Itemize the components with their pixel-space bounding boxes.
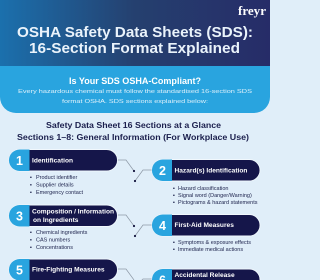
panel: section 6: Accidental Release — [174, 272, 235, 279]
connector 3 to 4 — [117, 215, 152, 237]
panel: section 3: Concentrations — [36, 245, 73, 251]
panel: section 2: ▪ — [173, 186, 175, 192]
panel: section 2: Hazard classification — [178, 186, 228, 192]
panel: section 5: Fire-Fighting Measures — [32, 266, 105, 274]
callout text — [18, 89, 252, 105]
panel: section 4: ▪ — [173, 240, 175, 246]
callout panel: compliance — [0, 66, 270, 113]
section heading: Sections 1–8: General Information (For Workplace Use) — [17, 133, 249, 142]
panel: section 3: ▪ — [30, 245, 32, 251]
panel: section 2: ▪ — [173, 193, 175, 199]
panel: section 4: Immediate medical actions — [178, 247, 243, 253]
callout heading: Is Your SDS OSHA-Compliant? — [69, 76, 201, 86]
panel: section 4: 4 — [159, 219, 166, 233]
title — [17, 25, 253, 57]
panel: section 3: Composition / Information — [32, 208, 114, 216]
panel: section 2: 2 — [159, 164, 166, 178]
logo: freyr: freyr — [238, 3, 266, 18]
panel: section 3: 3 — [16, 210, 23, 224]
section heading: Safety Data Sheet 16 Sections at a Glance — [46, 121, 221, 130]
title: OSHA Safety Data Sheets (SDS): — [17, 25, 253, 41]
panel: section 4: First-Aid Measures — [174, 222, 234, 229]
panel: section 3: CAS numbers — [36, 238, 70, 244]
panel: section 2: Hazard(s) Identification — [174, 168, 247, 174]
callout text: Every hazardous chemical must follow the standardised 16-section SDS — [18, 89, 252, 95]
panel: section 3: on Ingredients — [33, 217, 79, 224]
panel: section 3: Chemical ingredients — [36, 230, 88, 236]
panel: section 2: Signal word (Danger/Warning) — [178, 193, 252, 199]
callout text: format OSHA. SDS sections explained below: — [62, 99, 208, 105]
title: 16-Section Format Explained — [29, 41, 240, 57]
panel: section 1: Identification — [32, 158, 73, 164]
panel: section 3: ▪ — [30, 238, 32, 244]
panel: section 1: Emergency contact — [36, 190, 84, 196]
panel: section 1: ▪ — [30, 190, 32, 196]
panel: section 5: 5 — [16, 264, 23, 278]
panel: section 2: Pictograms & hazard statements — [178, 200, 258, 206]
panel: section 1: 1 — [16, 154, 23, 168]
panel: section 2: ▪ — [173, 200, 175, 206]
panel: section 1: ▪ — [30, 182, 32, 188]
panel: section 4: Symptoms & exposure effects — [178, 240, 251, 246]
panel: section 6 — [152, 269, 260, 280]
panel: section 3: ▪ — [30, 230, 32, 236]
panel: section 5 — [9, 259, 118, 280]
header banner — [0, 0, 270, 67]
panel: section 4 — [152, 214, 260, 253]
panel: section 2 — [152, 160, 260, 206]
panel: section 3 — [9, 205, 118, 251]
panel: section 1: Product identifier — [36, 175, 77, 181]
section heading — [17, 121, 249, 142]
panel: section 1: ▪ — [30, 175, 32, 181]
panel: section 1: Supplier details — [36, 182, 74, 188]
panel: section 1 — [9, 150, 118, 196]
panel: section 4: ▪ — [173, 247, 175, 253]
connector 5 to 6 — [117, 269, 152, 280]
connector 1 to 2 — [117, 160, 152, 182]
